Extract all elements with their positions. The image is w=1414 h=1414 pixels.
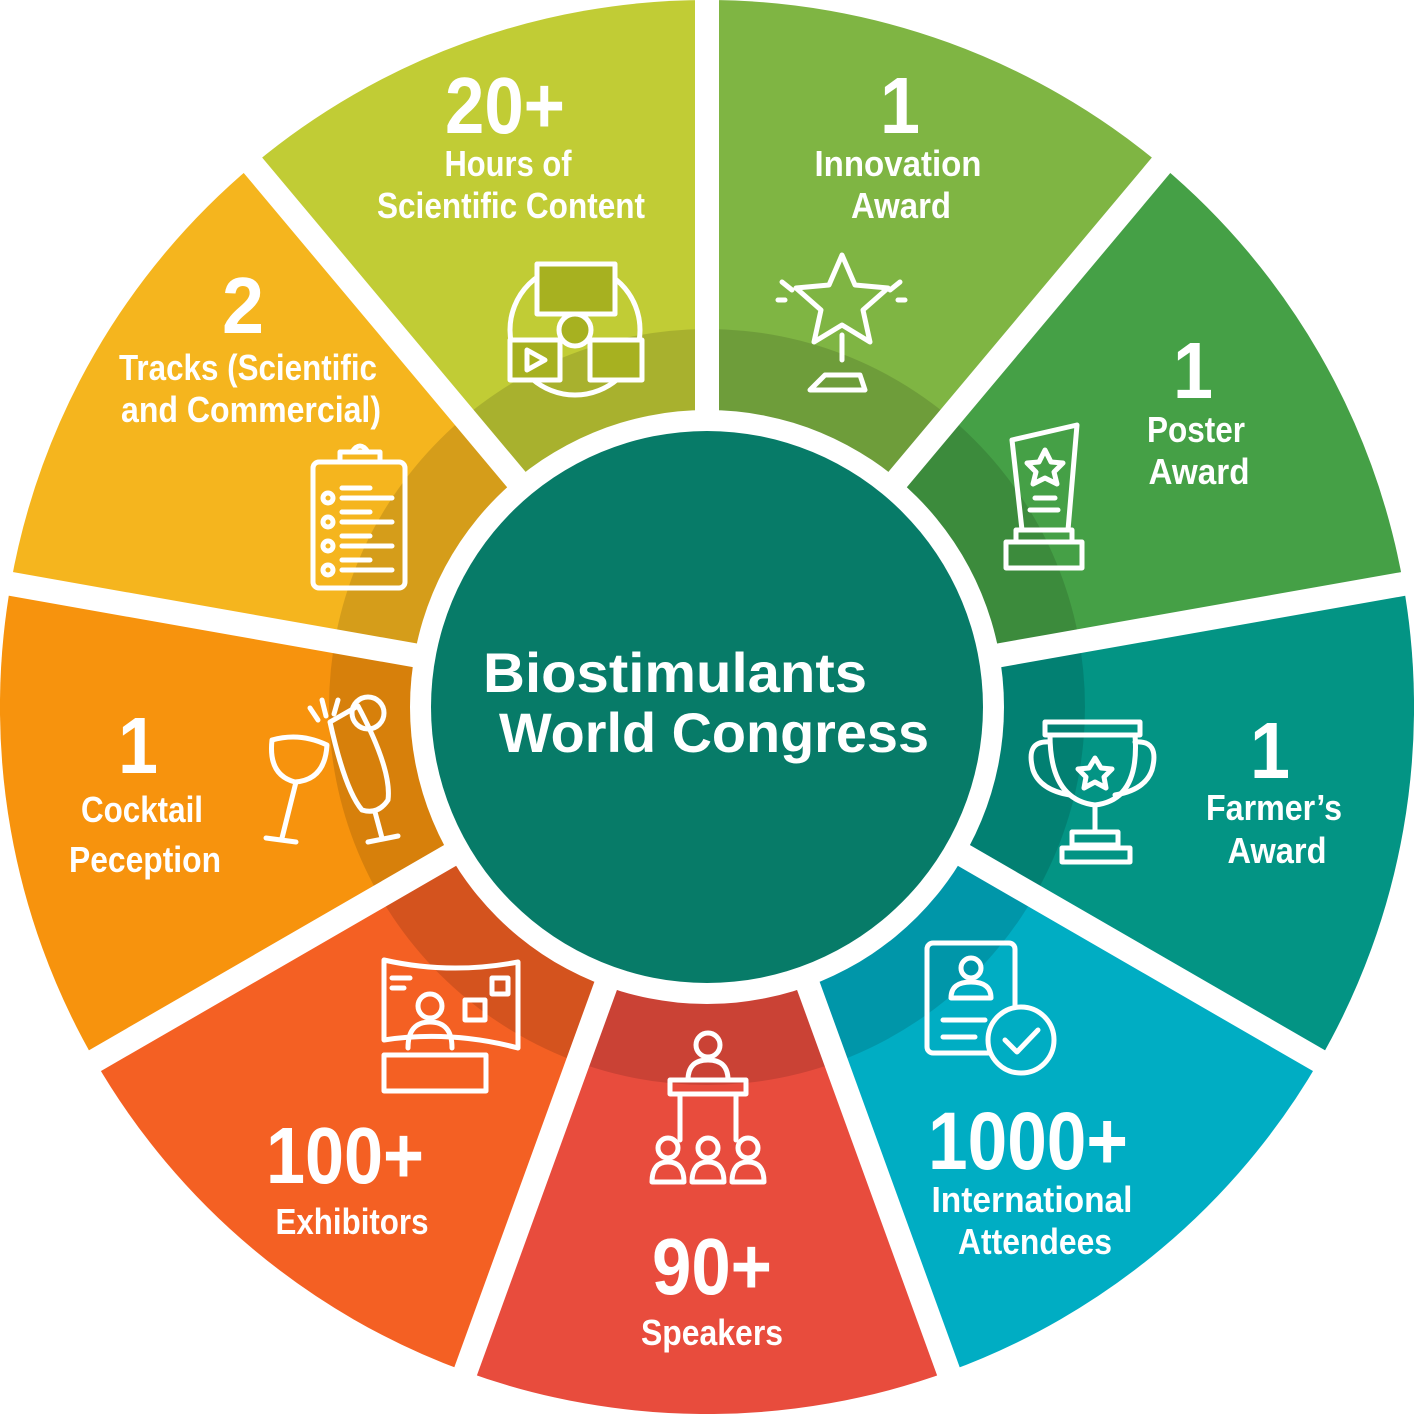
stat: tracks: Tracks (Scientific bbox=[119, 347, 377, 388]
icon: clipboard bbox=[313, 446, 405, 588]
stat: hours: Hours of bbox=[444, 143, 572, 184]
stat: cocktail bbox=[69, 701, 221, 880]
icon: badge check bbox=[927, 943, 1054, 1073]
stat: farmer's award bbox=[1206, 706, 1342, 871]
stat: farmer's award: Farmer’s bbox=[1206, 787, 1342, 828]
stat: attendees: 1000+ bbox=[928, 1096, 1128, 1187]
stat: attendees: Attendees bbox=[958, 1221, 1112, 1262]
icon: cup trophy bbox=[1031, 722, 1154, 862]
stat: exhibitors: Exhibitors bbox=[276, 1201, 428, 1242]
stat: speakers: Speakers bbox=[641, 1312, 783, 1353]
stat: poster award: Award bbox=[1148, 451, 1250, 492]
stat: speakers: 90+ bbox=[652, 1222, 772, 1311]
icon: cocktail glasses bbox=[266, 697, 398, 842]
stat: innovation award: Innovation bbox=[814, 143, 982, 184]
stat: exhibitors: 100+ bbox=[266, 1111, 424, 1200]
icon: podium speaker bbox=[652, 1033, 764, 1182]
stat: poster award bbox=[1147, 326, 1250, 492]
stat: farmer's award: 1 bbox=[1250, 706, 1290, 795]
stat: tracks: and Commercial) bbox=[121, 389, 381, 430]
center circle bbox=[431, 431, 983, 983]
stat: farmer's award: Award bbox=[1228, 830, 1326, 871]
stat: attendees: International bbox=[932, 1179, 1132, 1220]
stat: attendees bbox=[928, 1096, 1132, 1262]
stat: innovation award: 1 bbox=[880, 61, 920, 150]
stat: tracks: 2 bbox=[222, 261, 264, 350]
stat: cocktail: Peception bbox=[69, 839, 221, 880]
stat: hours: 20+ bbox=[445, 61, 565, 150]
stat: poster award: 1 bbox=[1173, 326, 1213, 415]
stat: hours: Scientific Content bbox=[377, 185, 645, 226]
stat: hours bbox=[377, 61, 645, 226]
stat: cocktail: 1 bbox=[118, 701, 158, 790]
stat: cocktail: Cocktail bbox=[81, 789, 203, 830]
stat: poster award: Poster bbox=[1147, 409, 1245, 450]
stat: innovation award: Award bbox=[851, 185, 951, 226]
icon: star trophy bbox=[778, 255, 905, 390]
center circle: World Congress bbox=[499, 701, 929, 764]
stat: speakers bbox=[641, 1222, 783, 1353]
icon: booth bbox=[384, 960, 518, 1091]
stat: tracks bbox=[119, 261, 381, 430]
icon: poster trophy bbox=[1006, 425, 1082, 568]
title: Biostimulants bbox=[483, 641, 867, 704]
stat: innovation award bbox=[814, 61, 982, 226]
stat: exhibitors bbox=[266, 1111, 428, 1242]
icon: content globe bbox=[510, 264, 642, 395]
